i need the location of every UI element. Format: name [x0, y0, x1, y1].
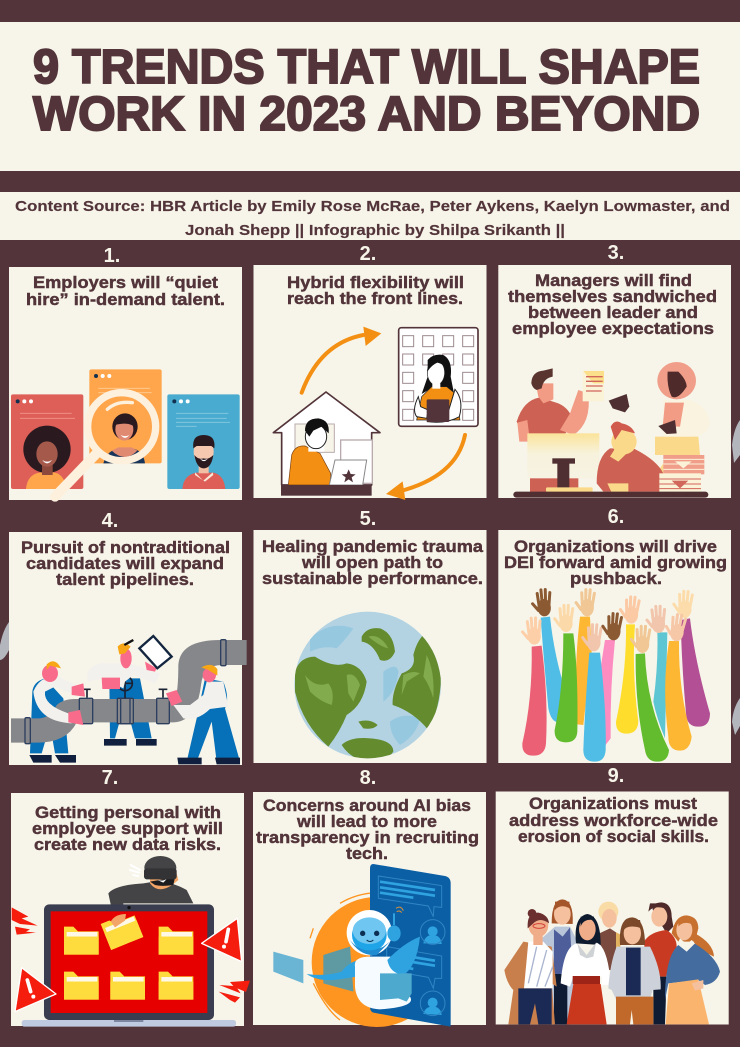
heading 2	[287, 274, 464, 308]
warning triangle left	[15, 968, 56, 1012]
title banner	[0, 22, 740, 171]
title: WORK IN 2023 AND BEYOND	[33, 88, 700, 141]
heading 3: themselves sandwiched	[508, 288, 717, 306]
number 4: 4.	[102, 510, 118, 532]
title	[33, 41, 700, 141]
number 9: 9.	[608, 765, 624, 787]
heading 9: address workforce-wide	[509, 812, 718, 830]
panel 1: quiet hire	[9, 245, 242, 500]
heading 5: sustainable performance.	[262, 570, 483, 588]
heading 9: erosion of social skills.	[518, 828, 709, 846]
heading 3: Managers will find	[535, 272, 692, 290]
panel 3: managers sandwiched	[498, 242, 731, 498]
number 1: 1.	[104, 245, 120, 267]
illustration: robot and phone	[273, 864, 451, 1027]
heading 1: hire” in-demand talent.	[26, 291, 225, 309]
illustration: workers fixing pipeline	[11, 636, 247, 764]
heading 3: employee expectations	[512, 320, 714, 338]
office building	[399, 328, 478, 426]
heading 8	[256, 797, 479, 863]
illustration: group of people	[504, 899, 720, 1024]
illustration: candidate profile cards with magnifier	[11, 369, 240, 497]
heading 7	[32, 804, 223, 854]
panel 4: nontraditional candidates	[9, 510, 247, 765]
heading 7: create new data risks.	[34, 836, 221, 854]
illustration: raised arms	[522, 589, 710, 762]
panel 7: data risks	[11, 767, 250, 1027]
content source band: Jonah Shepp || Infographic by Shilpa Srikanth ||	[185, 222, 565, 239]
heading 6	[504, 538, 727, 588]
heading 4: Pursuit of nontraditional	[21, 539, 230, 557]
content source band: Content Source: HBR Article by Emily Rose McRae, Peter Aykens, Kaelyn Lowmaster, and	[15, 198, 730, 215]
number 6: 6.	[608, 506, 624, 528]
panel 8: AI bias	[253, 767, 486, 1027]
warning triangle right	[202, 918, 242, 962]
number 5: 5.	[360, 508, 376, 530]
woman in blue sweater	[665, 915, 720, 1024]
illustration: globe	[294, 612, 441, 762]
number 2: 2.	[360, 243, 376, 265]
heading 8: tech.	[346, 845, 388, 863]
heading 4: candidates will expand	[26, 555, 224, 573]
woman in grey jacket	[608, 917, 661, 1024]
arrow: office to home	[398, 435, 465, 492]
heading 2: Hybrid flexibility will	[287, 274, 464, 292]
woman with bun	[504, 909, 557, 1024]
heading 8: Concerns around AI bias	[263, 797, 471, 815]
panel 2: hybrid flexibility	[254, 243, 486, 500]
heading 7: Getting personal with	[35, 804, 221, 822]
heading 2: reach the front lines.	[287, 290, 463, 308]
content source band	[0, 192, 740, 240]
arrow: home to office	[302, 335, 363, 393]
back row	[542, 899, 677, 1024]
heading 4: talent pipelines.	[56, 571, 194, 589]
panel 5: healing pandemic trauma	[254, 508, 486, 763]
decorative leaves	[0, 420, 740, 735]
heading 7: employee support will	[32, 820, 223, 838]
heading 6: DEI forward amid growing	[504, 554, 727, 572]
heading 9	[509, 795, 718, 846]
number 8: 8.	[360, 767, 376, 789]
title: 9 TRENDS THAT WILL SHAPE	[33, 41, 700, 94]
panel 9: social skills	[496, 765, 729, 1024]
illustration: hacker stealing files from laptop	[12, 856, 250, 1027]
heading 5	[262, 538, 484, 588]
illustration: home worker	[273, 327, 478, 500]
heading 5: will open path to	[301, 554, 443, 572]
number 7: 7.	[102, 767, 118, 789]
heading 9: Organizations must	[529, 795, 698, 813]
heading 3	[508, 272, 717, 338]
heading 1	[26, 274, 225, 309]
heading 5: Healing pandemic trauma	[262, 538, 484, 556]
heading 8: will lead to more	[296, 813, 437, 831]
heading 1: Employers will “quiet	[33, 274, 219, 292]
illustration: managers at desk	[513, 362, 710, 498]
heading 4	[21, 539, 230, 589]
panel 6: DEI	[498, 506, 731, 763]
number 3: 3.	[608, 242, 624, 264]
heading 6: Organizations will drive	[514, 538, 717, 556]
heading 3: between leader and	[528, 304, 698, 322]
woman in red skirt	[561, 914, 610, 1024]
heading 8: transparency in recruiting	[256, 829, 479, 847]
heading 6: pushback.	[570, 570, 662, 588]
